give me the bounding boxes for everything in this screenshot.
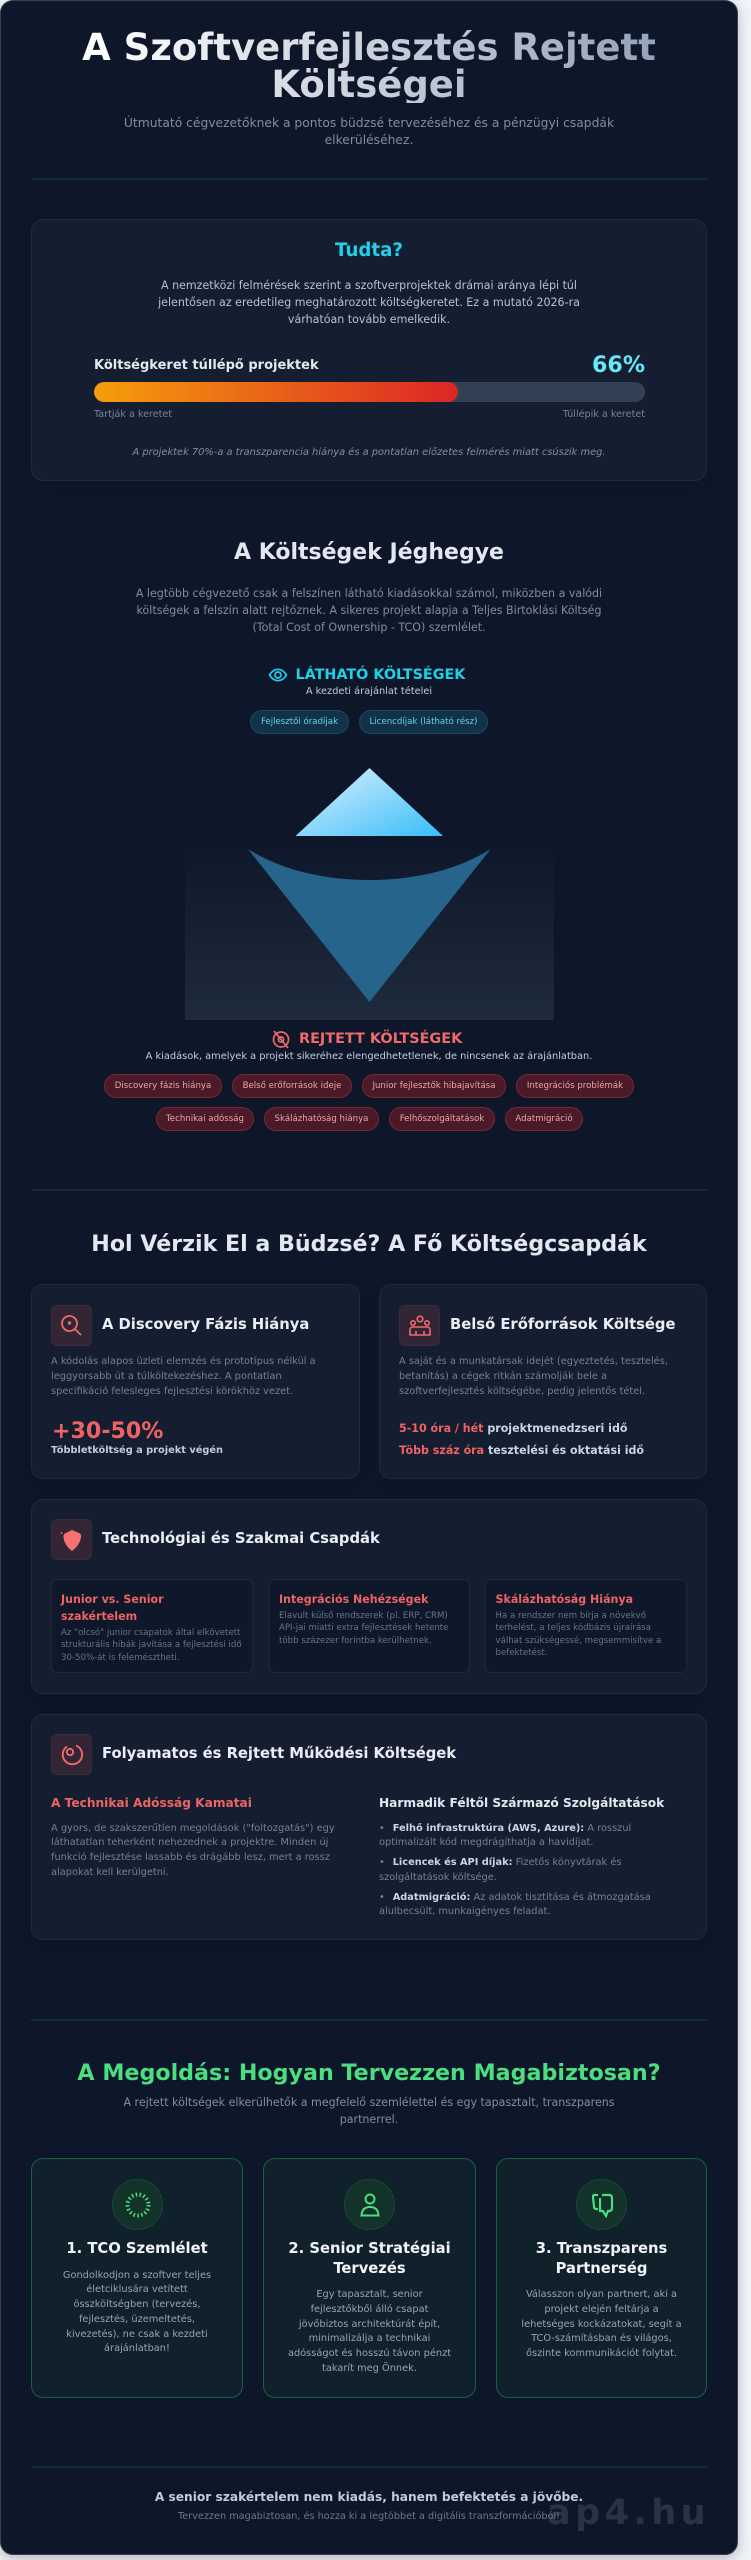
- sub-card title: szakértelem: [61, 1610, 137, 1622]
- callout text: [158, 279, 580, 326]
- progress bar: [94, 382, 645, 402]
- card text: szoftverfejlesztés költségébe, pedig jelentős tétel.: [399, 1386, 645, 1397]
- step title: Tervezés: [333, 2260, 406, 2277]
- card text: specifikáció felesleges fejlesztési körökhöz vezet.: [51, 1386, 293, 1397]
- paragraph: [51, 1822, 335, 1878]
- chip: [359, 710, 488, 734]
- panel: ongoing costs: [31, 1714, 707, 1940]
- footer headline: A senior szakértelem nem kiadás, hanem befektetés a jövőbe.: [155, 2490, 583, 2504]
- panel: step 3: [496, 2158, 707, 2398]
- step text: TCO-számításban és világos,: [531, 2333, 672, 2344]
- sub-card title: [60, 1592, 164, 1622]
- subheading: A Technikai Adósság Kamatai: [51, 1796, 252, 1810]
- italic note: A projektek 70%-a a transzparencia hiánya és a pontatlan előzetes felmérés miatt csúszik meg.: [132, 447, 606, 458]
- section heading: cost traps: Hol Vérzik El a Büdzsé? A Fő Költségcsapdák: [91, 1231, 647, 1257]
- paragraph: funkció fejlesztése lassabb és drágább lesz, mert a rossz: [51, 1852, 330, 1863]
- bullet: [379, 1857, 621, 1883]
- chip: Integrációs problémák: [527, 1081, 623, 1091]
- sub-card text: válhat szükségessé, megsemmisítve a: [496, 1636, 661, 1646]
- hidden heading: REJTETT KÖLTSÉGEK: [299, 1031, 462, 1047]
- panel: step 1: [31, 2158, 243, 2398]
- bullet: optimalizált kód megdrágíthatja a havidíjat.: [379, 1837, 593, 1848]
- section heading: iceberg: A Költségek Jéghegye: [234, 540, 504, 565]
- section intro: [123, 2096, 615, 2126]
- callout heading: Tudta?: [335, 240, 403, 261]
- card text: leggyorsabb út a túlköltekezéshez. A pontatlan: [51, 1371, 282, 1382]
- step text: projekt elején feltárja a: [544, 2304, 659, 2315]
- sub-card title: Integrációs Nehézségek: [279, 1592, 428, 1606]
- section intro: A rejtett költségek elkerülhetők a megfelelő szemlélettel és egy tapasztalt, transzparens: [123, 2096, 615, 2109]
- bullet: alulbecsült, munkaigényes feladat.: [379, 1906, 550, 1917]
- subtitle: Útmutató cégvezetőknek a pontos büdzsé tervezéséhez és a pénzügyi csapdák: [124, 116, 614, 130]
- sub-card text: [496, 1610, 661, 1658]
- panel: internal resources: [379, 1284, 707, 1479]
- chip: [104, 1074, 222, 1098]
- bar right label: Túllépik a keretet: [563, 409, 645, 420]
- section intro: költségek a felszín alatt rejtőznek. A sikeres projekt alapja a Teljes Birtoklási Költség: [137, 604, 601, 617]
- bullet: Felhő infrastruktúra (AWS, Azure): A rosszul: [393, 1822, 631, 1834]
- chip: [389, 1107, 495, 1131]
- chip: [516, 1074, 634, 1098]
- sub-card title: Skálázhatóság Hiánya: [496, 1592, 633, 1606]
- paragraph: alapokat kell kerülgetni.: [51, 1867, 169, 1878]
- title: Költségei: [271, 63, 467, 106]
- step title: 2. Senior Stratégiai: [288, 2240, 451, 2257]
- step text: minimalizálja a technikai: [309, 2333, 430, 2344]
- title: [0, 30, 738, 103]
- bullet: •: [379, 1822, 385, 1834]
- hidden costs label: [272, 1030, 463, 1048]
- icon: dashed circle: [112, 2179, 163, 2230]
- visible heading: LÁTHATÓ KÖLTSÉGEK: [296, 667, 465, 683]
- visible sub text: A kezdeti árajánlat tételei: [306, 686, 432, 697]
- step text: kivezetés), ne csak a kezdeti: [66, 2329, 208, 2340]
- card title: A Discovery Fázis Hiánya: [102, 1316, 309, 1333]
- card text: A kódolás alapos üzleti elemzés és prototípus nélkül a: [51, 1356, 316, 1367]
- sub-card text: több százezer forintba kerülhetnek.: [279, 1636, 432, 1646]
- step text: Egy tapasztalt, senior: [316, 2289, 423, 2300]
- card title: Belső Erőforrások Költsége: [450, 1316, 676, 1333]
- step text: összköltségben (tervezés,: [73, 2299, 201, 2310]
- title: A Szoftverfejlesztés Rejtett: [82, 26, 656, 69]
- chip: Fejlesztői óradíjak: [261, 717, 338, 727]
- stat line: Több száz óra tesztelési és oktatási idő: [399, 1444, 644, 1457]
- sub-card text: Az "olcsó" junior csapatok által elkövetett: [61, 1628, 240, 1638]
- icon: person: [344, 2179, 395, 2230]
- step title: [536, 2240, 667, 2277]
- chip: Junior fejlesztők hibajavítása: [372, 1081, 496, 1091]
- step title: Partnerség: [556, 2260, 647, 2277]
- stat: +30-50%: [52, 1418, 163, 1444]
- callout text: jelentősen az eredetileg meghatározott költségkeretet. Ez a mutató 2026-ra: [158, 296, 580, 309]
- chip: [232, 1074, 352, 1098]
- paragraph: láthatatlan teherként nehezednek a projektre. Minden új: [51, 1837, 328, 1848]
- iceberg graphic: [185, 768, 554, 1020]
- bullet list: [379, 1822, 651, 1917]
- step title: 1. TCO Szemlélet: [66, 2240, 208, 2257]
- bullet: •: [379, 1892, 385, 1902]
- sub-card text: terhelést, a teljes kódbázis újraírása: [496, 1623, 651, 1633]
- sub-card text: [279, 1610, 448, 1646]
- chip: Technikai adósság: [166, 1114, 244, 1124]
- bullet: [379, 1892, 651, 1917]
- icon: search: [51, 1305, 92, 1346]
- sub-card: junior: [51, 1579, 253, 1673]
- panel: Tudta callout: [31, 219, 707, 481]
- step title: 3. Transzparens: [536, 2240, 667, 2257]
- icon: eye: [268, 668, 288, 682]
- sub-card text: [61, 1628, 242, 1663]
- chip: Belső erőforrások ideje: [243, 1081, 341, 1091]
- bullet: Licencek és API díjak: Fizetős könyvtárak és: [393, 1857, 621, 1868]
- sub-card text: strukturális hibák javítása a fejlesztési idő: [61, 1640, 242, 1650]
- chip: [505, 1107, 583, 1131]
- subheading: Harmadik Féltől Származó Szolgáltatások: [379, 1796, 664, 1810]
- chip: Discovery fázis hiánya: [115, 1081, 211, 1091]
- subtitle: elkerüléséhez.: [325, 133, 413, 147]
- icon: shield bug: [51, 1519, 92, 1560]
- chip: [264, 1107, 379, 1131]
- chip: [250, 710, 349, 734]
- sub-card text: befektetést.: [496, 1648, 547, 1658]
- bullet: szolgáltatások költsége.: [379, 1872, 497, 1883]
- bullet: Adatmigráció: Az adatok tisztítása és átmozgatása: [393, 1892, 651, 1902]
- card text: A saját és a munkatársak idejét (egyeztetés, tesztelés,: [399, 1356, 668, 1367]
- step text: fejlesztőkből álló csapat: [311, 2304, 428, 2315]
- panel title: Folyamatos és Rejtett Működési Költségek: [102, 1745, 456, 1762]
- step text: őszinte kommunikációt folytat.: [526, 2348, 677, 2359]
- step text: életciklusára vetített: [86, 2284, 188, 2295]
- callout text: várhatóan tovább emelkedik.: [288, 313, 450, 326]
- step text: Gondolkodjon a szoftver teljes: [63, 2270, 211, 2280]
- stat: 66%: 66%: [592, 352, 645, 378]
- panel title: Technológiai és Szakmai Csapdák: [102, 1530, 380, 1547]
- step text: Válasszon olyan partnert, aki a: [526, 2289, 677, 2300]
- panel: step 2: [263, 2158, 476, 2398]
- card text: betanítás) a cégek ritkán számolják bele a: [399, 1371, 607, 1382]
- chip: Skálázhatóság hiánya: [275, 1114, 368, 1124]
- card text: [51, 1356, 316, 1397]
- hidden sub text: A kiadások, amelyek a projekt sikeréhez elengedhetetlenek, de nincsenek az árajánlatban.: [146, 1051, 592, 1062]
- sub-card text: Elavult külső rendszerek (pl. ERP, CRM): [279, 1611, 448, 1621]
- bullet: •: [379, 1857, 385, 1868]
- sub-card: integrations: [269, 1579, 470, 1673]
- step text: [521, 2289, 682, 2359]
- section intro: [136, 586, 602, 634]
- stat line: 5-10 óra / hét projektmenedzseri idő: [399, 1422, 628, 1435]
- chip: [156, 1107, 254, 1131]
- visible costs label: [268, 666, 466, 683]
- step text: árajánlatban!: [104, 2343, 170, 2354]
- panel: discovery: [31, 1284, 360, 1479]
- panel: tech traps: [31, 1499, 707, 1694]
- step text: adósságot és hosszú távon pénzt: [288, 2348, 451, 2359]
- section heading: solution: A Megoldás: Hogyan Tervezzen Magabiztosan?: [77, 2060, 661, 2086]
- step text: lehetséges kockázatokat, segít a: [521, 2319, 682, 2330]
- watermark: ap4.hu: [547, 2493, 710, 2533]
- icon: cycle: [51, 1734, 92, 1775]
- sub-card text: 30-50%-át is felemésztheti.: [61, 1653, 179, 1663]
- chip: Adatmigráció: [515, 1114, 573, 1124]
- icon: users: [399, 1305, 440, 1346]
- section intro: (Total Cost of Ownership - TCO) szemlélet.: [252, 621, 486, 634]
- footer text: Tervezzen magabiztosan, és hozza ki a legtöbbet a digitális transzformációból!: [178, 2511, 560, 2522]
- stat caption: Többletköltség a projekt végén: [51, 1445, 223, 1456]
- bar left label: Tartják a keretet: [94, 409, 172, 420]
- chip: Felhőszolgáltatások: [400, 1114, 484, 1124]
- step title: [288, 2240, 451, 2277]
- sub-card text: Ha a rendszer nem bírja a növekvő: [496, 1611, 646, 1621]
- sub-card title: Junior vs. Senior: [61, 1592, 164, 1606]
- sub-card text: API-jai miatti extra fejlesztések hetente: [279, 1623, 448, 1633]
- sub-card: scalability: [485, 1579, 687, 1673]
- section intro: A legtöbb cégvezető csak a felszínen látható kiadásokkal számol, miközben a valódi: [136, 586, 602, 600]
- card text: [399, 1356, 668, 1397]
- step text: [288, 2289, 451, 2374]
- step text: fejlesztés, üzemeltetés,: [79, 2314, 195, 2325]
- section intro: partnerrel.: [340, 2113, 398, 2126]
- bullet: [379, 1822, 631, 1848]
- step text: jövőbiztos architektúrát épít,: [299, 2319, 440, 2330]
- subtitle: [124, 115, 614, 147]
- paragraph: A gyors, de szakszerűtlen megoldások ("foltozgatás") egy: [51, 1822, 335, 1834]
- step text: [63, 2270, 211, 2354]
- bar label: Költségkeret túllépő projektek: [94, 358, 319, 373]
- chip: Licencdíjak (látható rész): [370, 717, 477, 727]
- step text: takarít meg Önnek.: [322, 2363, 417, 2374]
- icon: chat: [576, 2179, 627, 2230]
- callout text: A nemzetközi felmérések szerint a szoftverprojektek drámai aránya lépi túl: [161, 279, 577, 292]
- icon: eye off: [272, 1030, 290, 1048]
- chip: [362, 1074, 506, 1098]
